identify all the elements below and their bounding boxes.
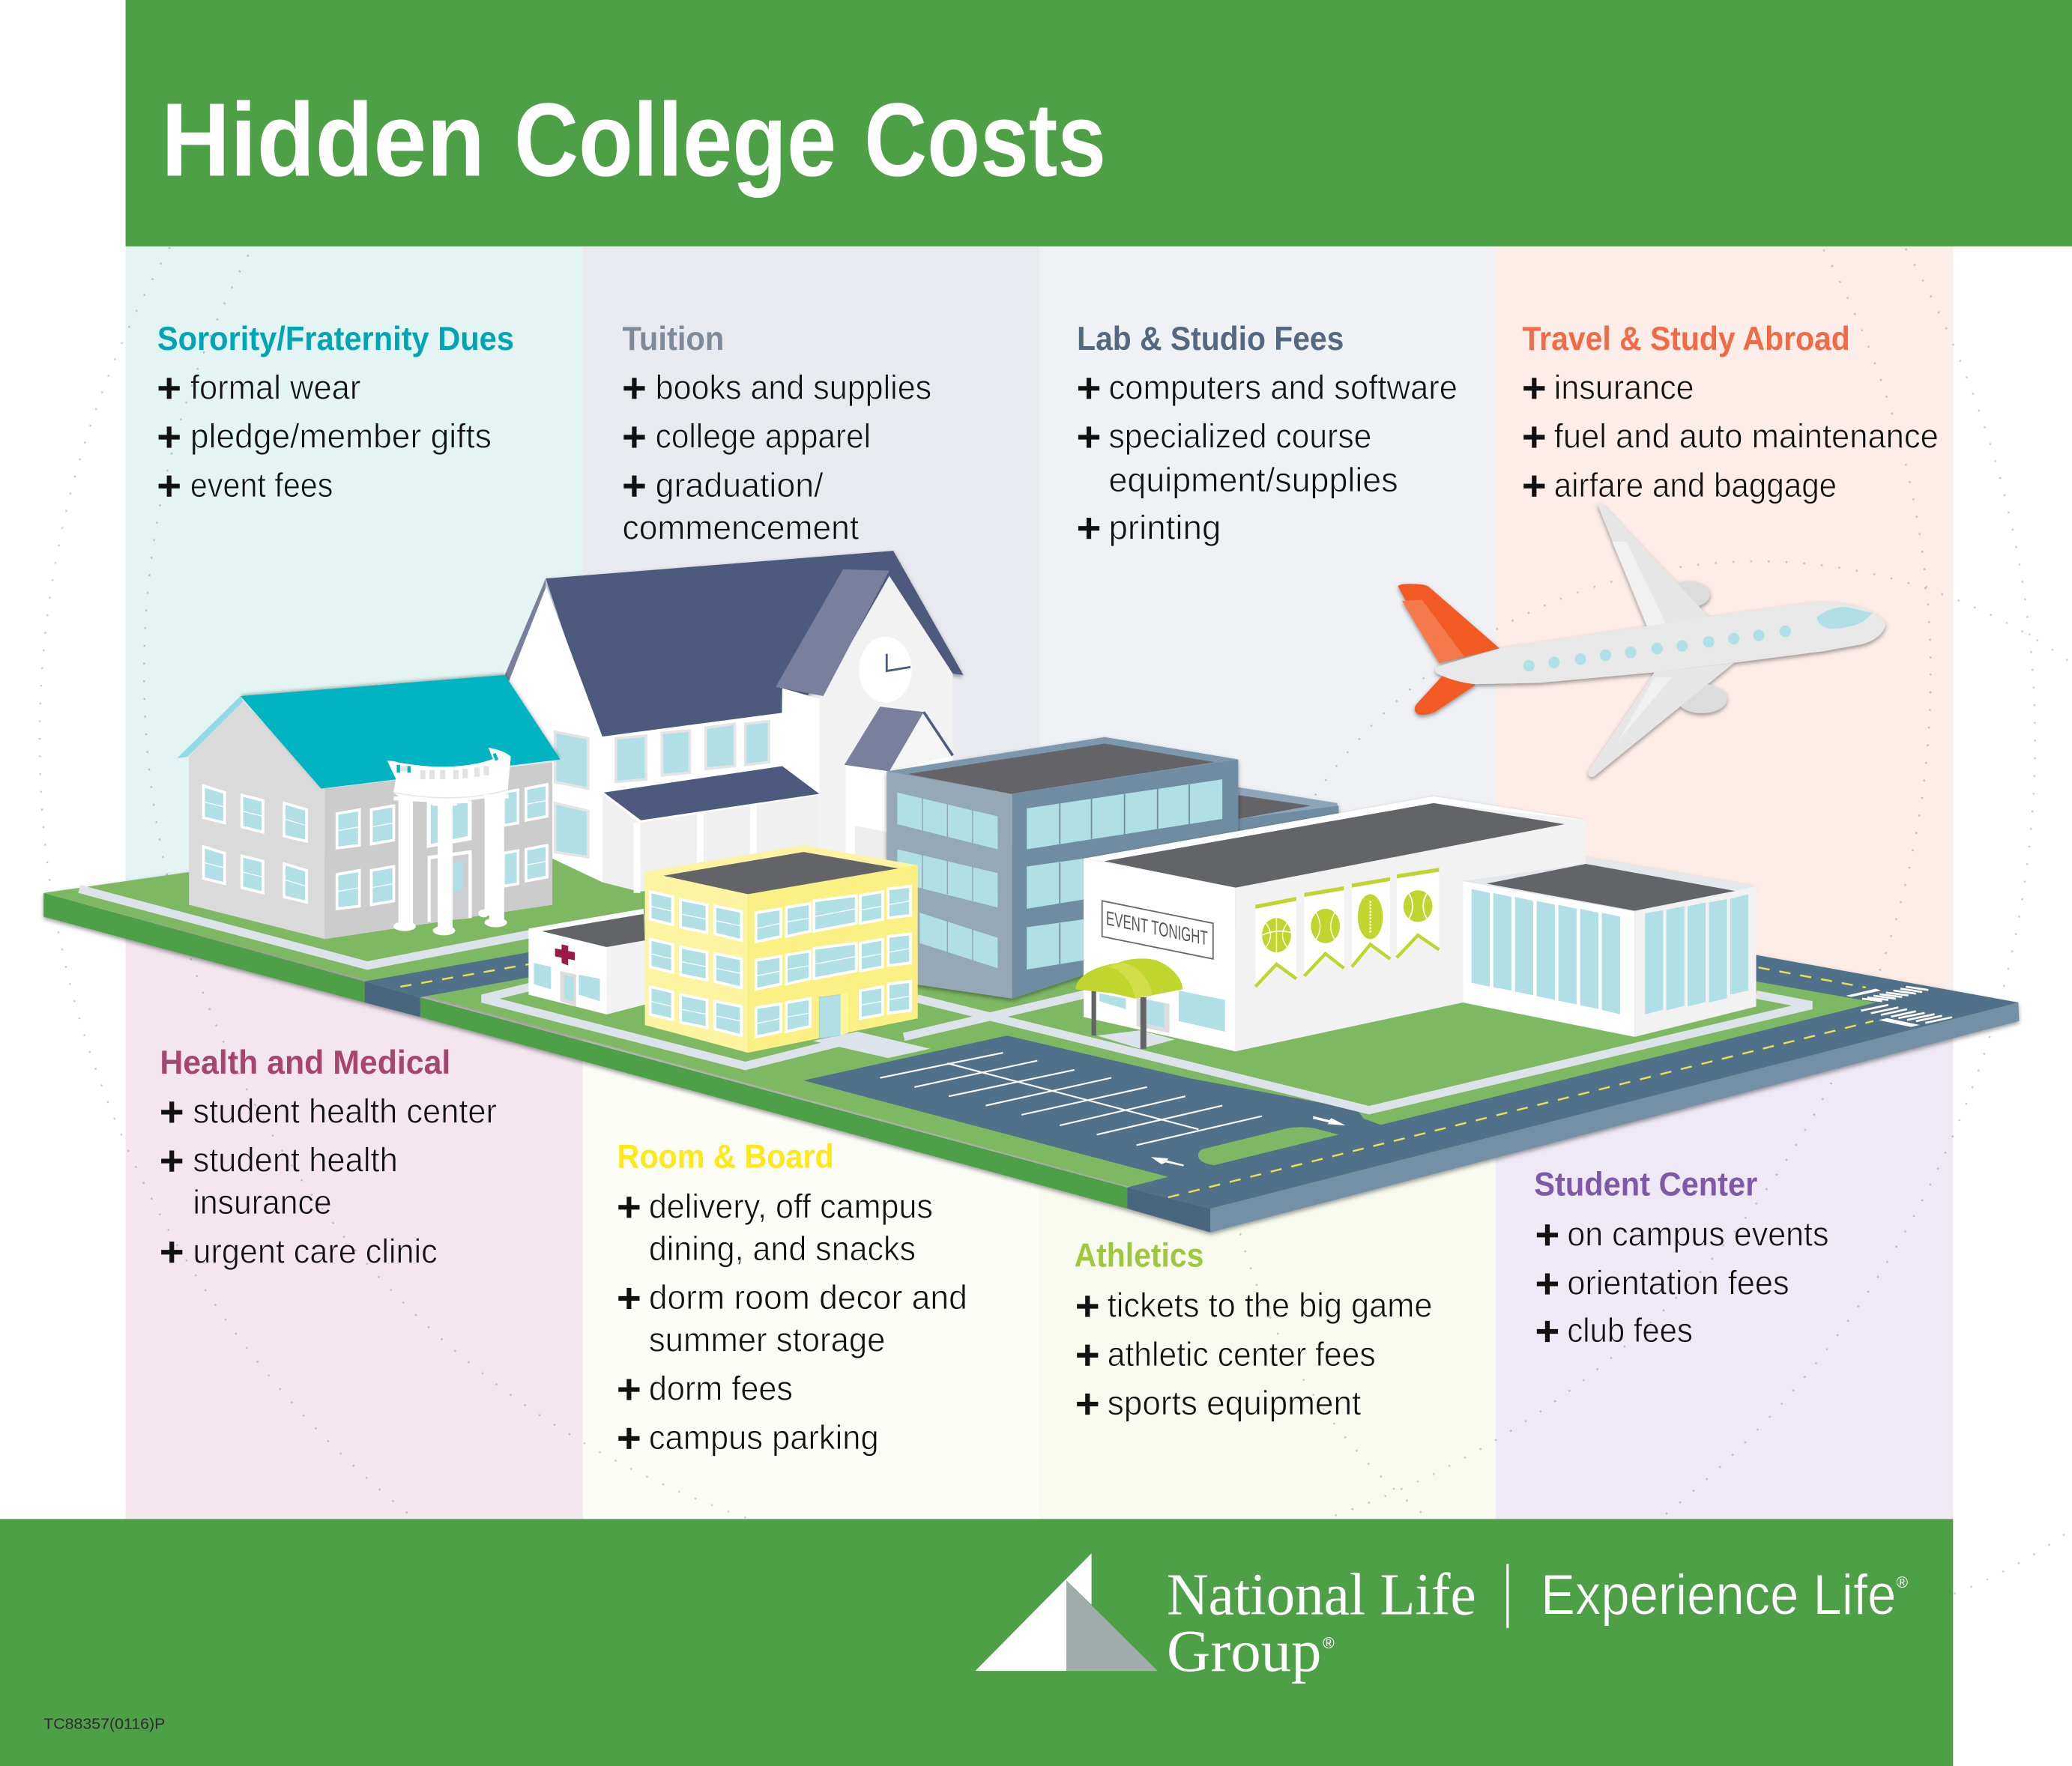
parking arrows: [1151, 1116, 1346, 1167]
panel: Tuition: [583, 246, 1040, 1519]
building: blue lab building: [887, 737, 1238, 999]
heading: Travel & Study Abroad: Travel & Study Abroad: [1522, 321, 1850, 357]
building: yellow dorm: [645, 845, 918, 1053]
event sign: [1102, 901, 1213, 959]
list: lab costs: computers and software: [1108, 368, 1458, 406]
center wall: [599, 700, 826, 883]
list: athletics costs: [1077, 1286, 1433, 1422]
list: athletics costs: tickets to the big game: [1108, 1286, 1433, 1325]
list: room and board costs: delivery, off campus: [649, 1187, 933, 1225]
logo text: National Life Group: Group: [1167, 1618, 1321, 1684]
roads and parking lot: [365, 952, 2018, 1209]
list: room and board costs: summer storage: [649, 1320, 885, 1358]
porch roof: [604, 766, 819, 820]
list: sorority costs: pledge/member gifts: [190, 417, 492, 456]
logo text: National Life Group: [1167, 1561, 1476, 1684]
cockpit window: [1817, 607, 1873, 629]
list: lab costs: [1078, 368, 1458, 546]
list: tuition costs: [623, 368, 931, 546]
banners: [1255, 868, 1439, 988]
list: health costs: [161, 1092, 497, 1270]
list: travel costs: fuel and auto maintenance: [1554, 417, 1939, 456]
footer banner: [0, 1519, 1953, 1766]
roof main: [546, 551, 964, 737]
list: athletics costs: athletic center fees: [1108, 1335, 1376, 1373]
title: College: [514, 81, 836, 198]
left windows: [897, 793, 997, 968]
panel: Health and Medical: [126, 925, 583, 1519]
gym wing: [1463, 881, 1634, 1037]
heading: Student Center: Student Center: [1534, 1166, 1757, 1203]
list: travel costs: airfare and baggage: [1554, 466, 1837, 504]
icon: red cross: [555, 944, 575, 966]
title: Costs: [864, 81, 1106, 198]
list: room and board costs: dorm room decor and: [649, 1278, 967, 1316]
wings: [1588, 504, 1734, 777]
illustration: campus platform: [43, 845, 2019, 1233]
tail fins: [1398, 584, 1499, 715]
building: white athletic center: [1075, 796, 1757, 1051]
logo text: National Life Group: ®: [1323, 1635, 1335, 1652]
walls: [189, 699, 325, 939]
logo text: National Life Group: National Life: [1167, 1561, 1476, 1627]
right windows: [1027, 779, 1222, 970]
heading: Sorority/Fraternity Dues: Sorority/Fraternity Dues: [157, 321, 514, 357]
building: rear annex: [1238, 787, 1338, 845]
list: student center costs: [1537, 1215, 1829, 1349]
banner: basketball: [1255, 897, 1296, 988]
event sign: EVENT TONIGHT: [1106, 907, 1208, 950]
list: sorority costs: formal wear: [190, 368, 360, 406]
list: athletics costs: sports equipment: [1108, 1384, 1362, 1422]
list: tuition costs: books and supplies: [656, 368, 931, 406]
list: room and board costs: dorm fees: [649, 1370, 793, 1408]
list: health costs: urgent care clinic: [193, 1232, 438, 1270]
clock: [859, 637, 912, 703]
list: health costs: student health: [193, 1141, 398, 1179]
banner: baseball: [1304, 886, 1344, 978]
illustration: airplane: [1398, 504, 1885, 777]
job code: TC88357(0116)P: [43, 1717, 165, 1733]
parking stall lines: [880, 1053, 1262, 1145]
building: Tuition hall with clock tower: [505, 551, 964, 893]
list: student center costs: club fees: [1567, 1311, 1693, 1349]
heading: Lab & Studio Fees: Lab & Studio Fees: [1077, 321, 1344, 357]
dorm windows: [650, 886, 910, 1038]
columns: [393, 794, 509, 935]
building: gray sorority house: [177, 675, 561, 939]
panel: Sorority/Fraternity Dues: [126, 246, 583, 1519]
list: student center costs: orientation fees: [1567, 1264, 1789, 1302]
icon: National Life Group triangle logo: [975, 1553, 1158, 1671]
heading: Tuition: Tuition: [623, 321, 724, 357]
right entry wall: [846, 755, 952, 872]
windows: [204, 784, 547, 848]
tower walls: [819, 576, 952, 859]
list: student center costs: on campus events: [1567, 1215, 1829, 1253]
door: [819, 994, 841, 1038]
list: health costs: student health center: [193, 1092, 497, 1130]
road markings: [400, 964, 1873, 1197]
crosswalk stripes: [1861, 987, 1952, 1023]
heading: Athletics: Athletics: [1075, 1238, 1203, 1274]
list: sorority costs: [159, 368, 492, 504]
building: health center: [528, 909, 647, 1014]
list: travel costs: [1523, 368, 1939, 504]
banner: tennis ball: [1397, 868, 1439, 959]
clinic windows and door: [534, 963, 600, 1006]
teal roof: [241, 675, 561, 788]
panel: Travel & Study Abroad: [1496, 246, 1953, 1519]
list: lab costs: specialized course: [1108, 417, 1371, 456]
sidewalks: [79, 889, 1812, 1110]
small gable roof: [845, 707, 924, 772]
heading: Room & Board: Room & Board: [617, 1138, 834, 1175]
list: tuition costs: graduation/: [656, 466, 824, 504]
center entry: [427, 800, 472, 922]
fuselage: [1435, 602, 1885, 684]
list: room and board costs: dining, and snacks: [649, 1230, 916, 1268]
title: Hidden: [161, 81, 485, 198]
lawn island: [1198, 1127, 1338, 1165]
crosswalk stop bars: [1846, 989, 1920, 1027]
tagline: Experience Life: ®: [1896, 1574, 1908, 1591]
balcony railing: [387, 748, 511, 802]
panel: Student Center: [1496, 1004, 1953, 1519]
lower porch: [602, 794, 819, 892]
list: room and board costs: campus parking: [649, 1418, 879, 1457]
engines: [1667, 581, 1727, 713]
tagline: Experience Life: Experience Life: [1541, 1563, 1896, 1627]
panel: Lab & Studio Fees: [1040, 246, 1497, 1519]
platform base: [43, 845, 2019, 1233]
list: tuition costs: commencement: [623, 508, 860, 546]
list: tuition costs: college apparel: [656, 417, 871, 456]
entry windows: [1099, 991, 1225, 1033]
list: lab costs: printing: [1108, 508, 1221, 546]
passenger windows: [1523, 626, 1791, 671]
left gable wall: [509, 585, 602, 883]
upper windows: [555, 722, 769, 857]
list: lab costs: equipment/supplies: [1108, 461, 1398, 499]
panel: Athletics: [1040, 1056, 1497, 1519]
list: sorority costs: event fees: [190, 466, 333, 504]
banner: football: [1352, 877, 1390, 968]
list: travel costs: insurance: [1554, 368, 1694, 406]
header banner: [126, 0, 2072, 247]
wing glass panes: [1472, 889, 1748, 1014]
list: room and board costs: [618, 1187, 967, 1457]
panel: Room & Board: [583, 951, 1040, 1519]
title: [161, 81, 1106, 198]
heading: Health and Medical: Health and Medical: [160, 1044, 450, 1081]
awning: [1075, 958, 1183, 1049]
list: health costs: insurance: [193, 1183, 332, 1221]
